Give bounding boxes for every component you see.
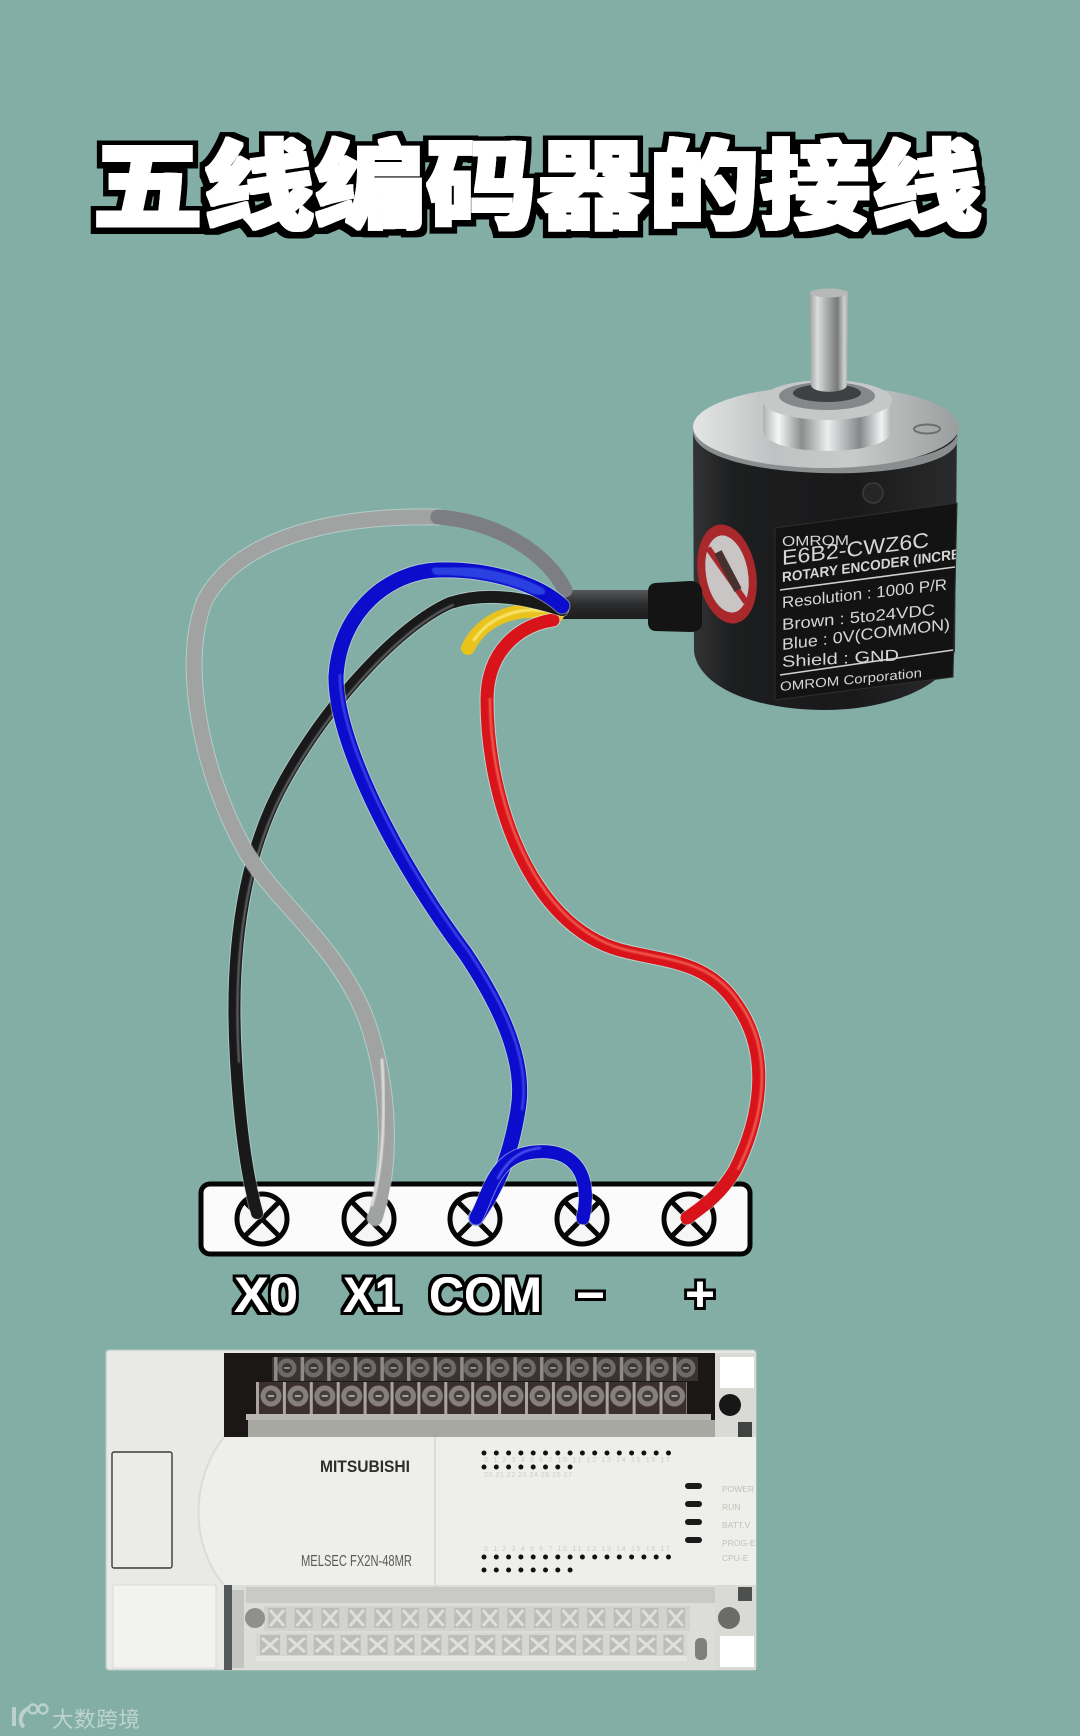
PLC bottom right corner	[715, 1585, 756, 1670]
terminal screw X0	[237, 1194, 287, 1244]
terminal screw X1	[344, 1194, 394, 1244]
PLC lower left cover	[113, 1585, 216, 1668]
blue jumper wire	[476, 1148, 585, 1218]
title: 五线编码器的接线	[92, 133, 982, 242]
watermark logo	[14, 1704, 48, 1727]
yellow wire	[468, 610, 557, 648]
watermark	[14, 1704, 140, 1732]
nameplate resolution: Resolution : 1000 P/R	[782, 576, 947, 612]
encoder body	[693, 425, 957, 710]
blue wire	[336, 570, 562, 1218]
brand MITSUBISHI: MITSUBISHI	[320, 1457, 410, 1476]
gray wire	[194, 517, 565, 1218]
nameplate model: E6B2-CWZ6C	[782, 529, 929, 570]
encoder	[563, 288, 960, 710]
nameplate blue: Blue : 0V(COMMON)	[782, 615, 950, 654]
model FX2N-48MR: MELSEC FX2N-48MR	[301, 1553, 412, 1570]
red wire	[487, 620, 762, 1218]
black wire	[234, 597, 562, 1213]
PLC case	[106, 1350, 756, 1670]
PLC left cover window	[112, 1452, 172, 1568]
nameplate type: ROTARY ENCODER (INCRE	[782, 546, 960, 585]
label plus: +	[685, 1266, 715, 1322]
encoder collar	[762, 380, 892, 451]
input output numbering: 20 21 22 23 24 25 26 27	[484, 1472, 572, 1479]
label X1: X1	[343, 1267, 401, 1323]
watermark text: 大数跨境	[52, 1708, 140, 1732]
label COM: COM	[429, 1267, 542, 1323]
warning sticker	[690, 520, 764, 628]
terminal block	[201, 1184, 750, 1254]
status LEDs	[685, 1483, 702, 1543]
label minus: −	[576, 1267, 605, 1323]
terminal screw COM	[450, 1194, 500, 1244]
status LED captions: BATT.V	[722, 1520, 751, 1530]
status LED captions: RUN	[722, 1502, 740, 1512]
status LED captions: POWER	[722, 1484, 754, 1494]
PLC	[106, 1350, 756, 1670]
nameplate brown: Brown : 5to24VDC	[782, 601, 935, 634]
encoder nameplate	[775, 503, 960, 700]
input output numbering: 0 1 2 3 4 5 6 7 10 11 12 13 14 15 16 17	[484, 1457, 670, 1464]
encoder top plate	[693, 386, 959, 473]
terminal labels	[234, 1266, 715, 1323]
input output numbering	[484, 1457, 670, 1553]
PLC bottom terminal strip	[224, 1585, 716, 1670]
terminal screw minus	[557, 1194, 607, 1244]
PLC top right corner	[715, 1353, 756, 1437]
wires	[194, 517, 762, 1218]
terminal indicator dots	[484, 1453, 670, 1570]
nameplate corporation: OMROM Corporation	[780, 665, 922, 694]
input output numbering: 0 1 2 3 4 5 6 7 10 11 12 13 14 15 16 17	[484, 1546, 670, 1553]
PLC front panel	[198, 1437, 756, 1585]
status LED captions	[722, 1484, 756, 1563]
nameplate shield: Shield : GND	[782, 647, 899, 671]
encoder cable and strain relief	[563, 581, 702, 632]
label X0: X0	[234, 1267, 298, 1323]
PLC top terminal strip	[224, 1353, 715, 1437]
nameplate brand: OMROM	[782, 532, 849, 549]
status LED captions: CPU-E	[722, 1553, 749, 1563]
status LED captions: PROG-E	[722, 1538, 756, 1548]
terminal screw plus	[664, 1194, 714, 1244]
encoder shaft	[810, 288, 848, 392]
